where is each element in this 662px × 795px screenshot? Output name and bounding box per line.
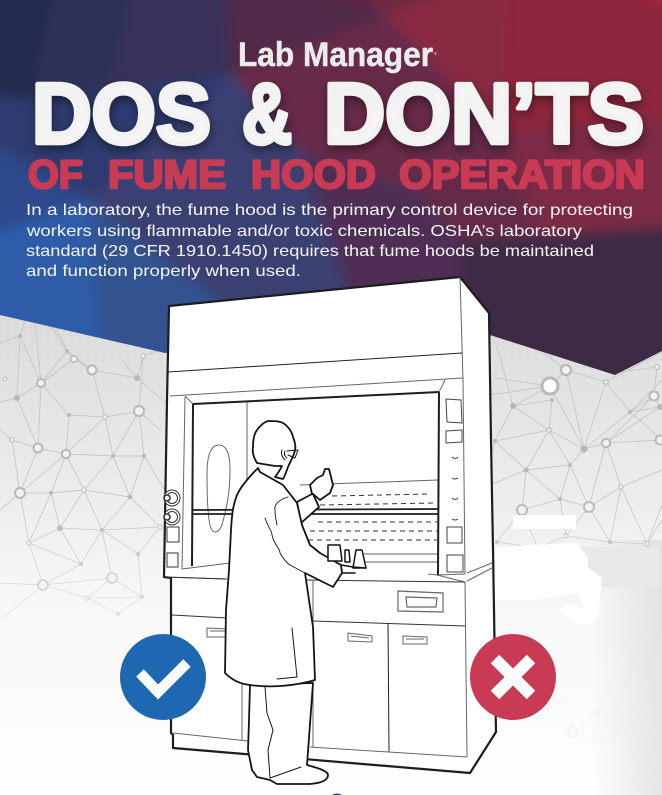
- intro paragraph: workers using flammable and/or toxic chemicals. OSHA’s laboratory: [26, 223, 582, 240]
- erased white patches: [495, 515, 660, 625]
- icon: do check mark: [120, 634, 206, 720]
- bottom edge mark: [332, 794, 342, 795]
- left control knobs and panels: [164, 490, 180, 567]
- raised arm holding flask: [297, 469, 333, 523]
- lower background: network pattern: [0, 300, 662, 795]
- intro paragraph: standard (29 CFR 1910.1450) requires that fume hoods be maintained: [26, 243, 594, 260]
- fume hood illustration: [164, 277, 496, 784]
- intro paragraph: and function properly when used.: [26, 263, 301, 280]
- icon: don't cross mark: [470, 634, 556, 720]
- lab worker figure: [225, 421, 366, 784]
- hood structural lines: [164, 277, 492, 757]
- subtitle: of fume hood operation: OPERATION: [399, 153, 645, 197]
- lab coat: [225, 468, 342, 686]
- interior dashed lines: [308, 494, 437, 540]
- intro paragraph: [26, 202, 633, 280]
- title: DOS & DON'TS: DOS: [32, 67, 211, 162]
- intro paragraph: In a laboratory, the fume hood is the primary control device for protecting: [26, 202, 633, 219]
- title: DOS & DON'TS: DON’TS: [324, 67, 644, 162]
- right control panel: [446, 399, 463, 572]
- subtitle: of fume hood operation: OF: [28, 153, 83, 197]
- head: [253, 421, 295, 479]
- base cabinet lines: [164, 577, 467, 757]
- logo: Lab Manager: ®: [434, 51, 437, 56]
- sash window frame: [192, 392, 439, 575]
- subtitle: of fume hood operation: [28, 153, 645, 197]
- beakers on bench: [328, 545, 366, 568]
- hood body outline: [164, 277, 496, 773]
- subtitle: of fume hood operation: FUME: [108, 153, 226, 197]
- logo: Lab Manager: Lab Manager: [238, 36, 433, 74]
- trousers and shoes: [248, 683, 328, 784]
- title: DOS & DON'TS: [32, 67, 644, 162]
- header polygon background: [0, 0, 662, 400]
- subtitle: of fume hood operation: HOOD: [251, 153, 376, 197]
- ear and glasses: [281, 450, 298, 460]
- title: DOS & DON'TS: &: [242, 67, 292, 162]
